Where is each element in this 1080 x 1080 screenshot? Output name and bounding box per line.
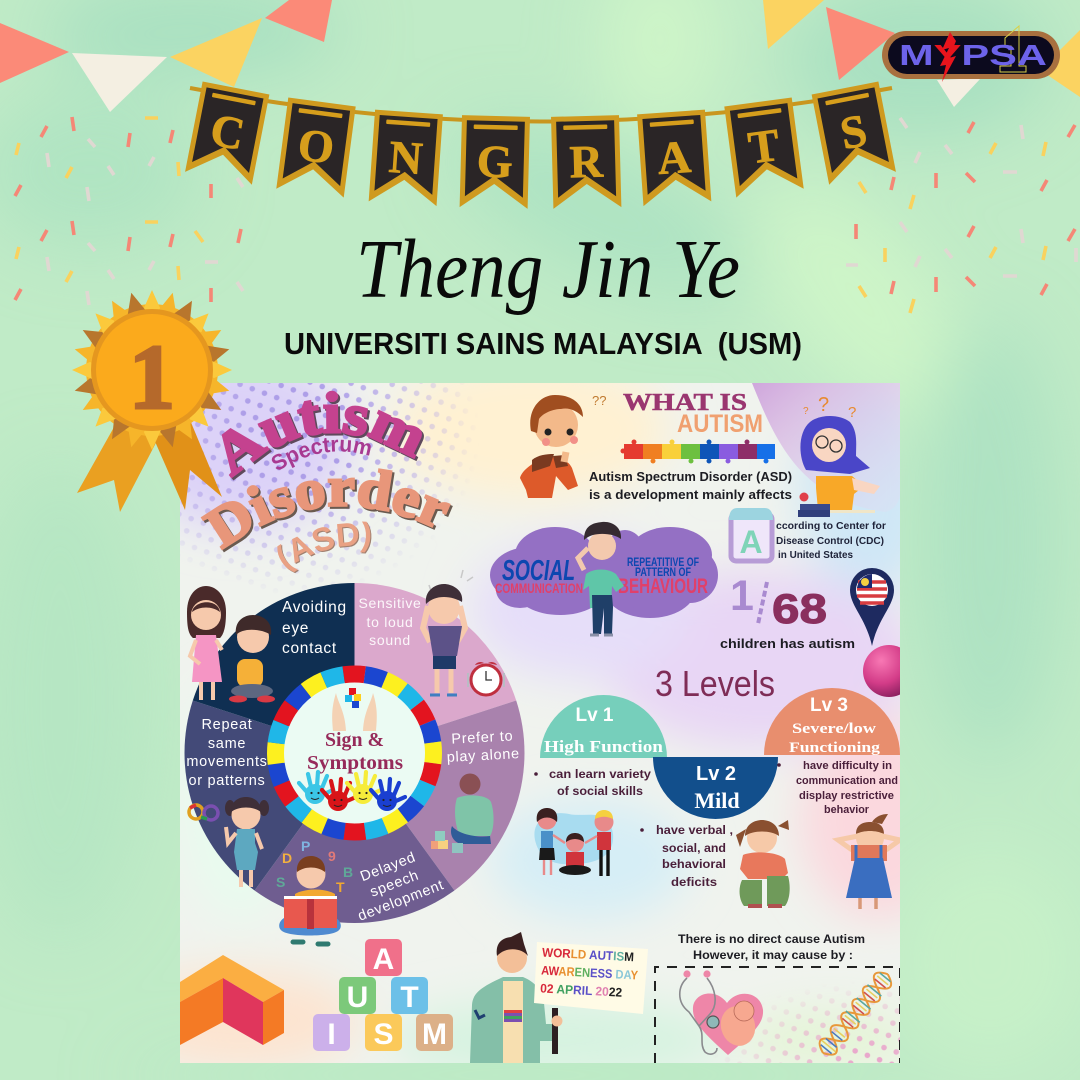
icon: letter A block (729, 508, 773, 561)
level 1: Lv 1 (575, 705, 614, 726)
segment: repeat same movements: or patterns (188, 773, 266, 789)
icon: four coloured hands (299, 772, 405, 811)
winner name: Theng Jin Ye (356, 223, 740, 316)
text: according to cdc: ccording to Center for (776, 520, 886, 532)
segment: repeat same movements: Repeat (202, 717, 252, 733)
autism letter blocks (313, 939, 453, 1051)
floating letters: P (301, 838, 310, 854)
statistic: 1/68 (730, 572, 827, 632)
character: thinking girl with books: ? (803, 406, 809, 417)
heading: what is autism: WHAT IS (623, 390, 747, 416)
autism letter blocks: T (400, 981, 419, 1014)
floating letters: D (282, 850, 292, 866)
level 3: communication and (796, 775, 898, 787)
title: Autism Spectrum Disorder (ASD): Spectrum (272, 438, 371, 470)
heading: what is autism (592, 390, 763, 438)
character: thinking girl with books: ? (848, 404, 856, 421)
character: thinking girl with books: ? (818, 394, 829, 416)
flag O (276, 98, 356, 198)
segment: delayed speech development: speech (368, 867, 421, 901)
icon: infinity rainbow (189, 805, 218, 820)
poster (180, 383, 900, 1063)
text: no direct cause: There is no direct cause Autism (678, 934, 865, 946)
level 1: of social skills (557, 784, 643, 798)
heading: sign and symptoms (307, 729, 403, 774)
title: Autism Spectrum Disorder (ASD): (ASD) (277, 522, 372, 574)
character: man with jacket (470, 932, 562, 1063)
halftone dots top left (180, 383, 468, 586)
flag R (551, 115, 621, 209)
level 2: have verbal , (656, 823, 733, 837)
flag R: R (569, 136, 604, 187)
sign: world autism awareness day: 02 APRIL 2022 (540, 981, 623, 1000)
sign: world autism awareness day (534, 942, 648, 1014)
level 2: Mild (694, 788, 740, 813)
hub centre (282, 681, 426, 825)
segment: delayed speech development: Delayed (358, 849, 418, 885)
character: family of three (534, 808, 614, 876)
flag S: S (836, 104, 871, 159)
flag N (369, 110, 443, 206)
logo: MYPSA: M Y PSA (899, 40, 1047, 72)
sunburst (72, 290, 232, 450)
university: UNIVERSITI SAINS MALAYSIA (USM) (284, 326, 802, 361)
icon: heart with fetus and stethoscope (680, 970, 763, 1055)
label: repetitive pattern: REPEATITIVE OF (627, 555, 699, 569)
heading: what is autism: AUTISM (677, 410, 763, 438)
wheel: sign and symptoms (185, 583, 524, 925)
flag T (724, 98, 804, 198)
autism letter blocks: I (327, 1018, 336, 1051)
banner string (190, 88, 892, 122)
icon: toy blocks (431, 831, 463, 853)
level 2 (640, 757, 778, 889)
character: confused boy (578, 522, 624, 635)
segment: prefer to play alone: play alone (446, 746, 520, 766)
segment: repeat same movements: movements (186, 754, 268, 770)
character: girl in pink (187, 586, 226, 700)
banner: CONGRATS (185, 82, 896, 209)
character: sitting girl hugging knees (736, 820, 790, 906)
floating letters: B (343, 864, 353, 880)
segment: sensitive to loud sound: sound (369, 632, 411, 648)
segment: sensitive to loud sound (354, 583, 516, 726)
puzzle ring (266, 664, 443, 842)
label: repetitive pattern (627, 555, 699, 579)
sign: world autism awareness day: WORLD AUTISM (542, 945, 634, 964)
autism letter blocks: A (373, 943, 394, 976)
level 2: Lv 2 (696, 763, 736, 785)
halftone dots bottom right (726, 988, 900, 1063)
level 2: behavioral (662, 857, 726, 871)
autism letter blocks: S (373, 1018, 394, 1051)
label: communication: COMMUNICATION (495, 580, 583, 596)
ribbon right (150, 420, 222, 510)
title: Autism Spectrum Disorder (ASD) (200, 390, 453, 574)
bunting top left (0, 0, 332, 112)
floating letters: 9 (328, 848, 336, 864)
character: child playing alone (451, 774, 494, 844)
text: asd definition (589, 470, 792, 502)
level 1: can learn variety (549, 767, 651, 781)
heading: what is autism: ?? (592, 393, 606, 408)
segment: avoiding eye contact: contact (282, 640, 337, 657)
icon: hands holding puzzle (332, 688, 377, 731)
heading: sign and symptoms: Sign & (325, 729, 384, 751)
logo: isometric block (180, 955, 284, 1045)
level 3: display restrictive (799, 790, 894, 802)
flag A: A (656, 131, 693, 184)
label: repetitive pattern: PATTERN OF (635, 565, 691, 579)
level 3: Functioning (789, 740, 881, 756)
flag S (812, 82, 896, 185)
character: seated boy in orange (229, 615, 275, 702)
segment: sensitive to loud sound: to loud (367, 614, 413, 630)
level 1: High Function (544, 737, 664, 756)
text: children has autism: children has autism (720, 636, 855, 651)
level 3: Severe/low (792, 721, 876, 737)
segment: delayed speech development: development (356, 877, 446, 925)
flag G (460, 115, 530, 209)
character: girl covering ears (838, 814, 900, 909)
label: behaviour: BEHAVIOUR (618, 575, 708, 598)
segment: avoiding eye contact: eye (282, 620, 309, 637)
dashed causes box (655, 967, 900, 1063)
flag G: G (476, 136, 513, 187)
icon: alarm clock (468, 662, 504, 695)
icon: malaysia map pin (850, 568, 894, 646)
level 2: deficits (671, 875, 717, 889)
segment: repeat same movements (184, 700, 311, 890)
segment: avoiding eye contact: Avoiding (282, 599, 347, 616)
pink sphere (863, 645, 915, 697)
text: according to cdc: in United States (778, 549, 853, 561)
flag T: T (745, 119, 782, 173)
heading: sign and symptoms: Symptoms (307, 752, 403, 774)
segment: sensitive to loud sound: Sensitive (358, 595, 422, 611)
text: no direct cause: However, it may cause by : (693, 950, 853, 962)
ribbon left (77, 420, 160, 512)
text: no direct cause (678, 934, 865, 962)
cloud: social communication and behaviour (490, 522, 718, 635)
segment: prefer to play alone: Prefer to (451, 728, 514, 748)
floating letters (276, 842, 352, 892)
title: Autism Spectrum Disorder (ASD): Autism (222, 390, 424, 480)
level 3 (764, 688, 900, 816)
heading: 3 levels: 3 Levels (655, 663, 775, 704)
flag A (637, 110, 711, 206)
segment: repeat same movements: same (208, 736, 246, 752)
medal (72, 290, 232, 512)
statistic: 1/68: 68 (772, 585, 827, 632)
floating letters: T (336, 879, 345, 895)
sign: world autism awareness day: AWARENESS DAY (541, 963, 639, 983)
poster background (180, 383, 900, 1063)
level 3: Lv 3 (810, 695, 848, 716)
label: social: SOCIAL (502, 555, 575, 587)
level 3: have difficulty in (803, 760, 892, 772)
bunting top right (763, 0, 1080, 107)
rainbow puzzle strip (620, 440, 775, 464)
statistic: 1/68: 1 (730, 572, 754, 620)
confetti left (15, 117, 243, 305)
floating letters: S (276, 874, 285, 890)
title: Autism Spectrum Disorder (ASD): Disorder (200, 468, 453, 552)
icon: dna helix (815, 968, 895, 1059)
text: asd definition: Autism Spectrum Disorder (ASD) (589, 470, 792, 484)
text: according to cdc: Disease Control (CDC) (776, 535, 884, 547)
character: thinking boy (520, 395, 583, 498)
segment: delayed speech development (254, 820, 454, 923)
character: boy covering ears (423, 570, 473, 695)
level 3: behavior (824, 804, 870, 816)
autism letter blocks: U (347, 981, 368, 1014)
medal number: 1 (129, 326, 175, 428)
logo: MYPSA (882, 26, 1060, 82)
text: according to cdc (776, 520, 886, 561)
level 1 (534, 695, 667, 798)
segment: avoiding eye contact (192, 583, 354, 726)
text: asd definition: is a development mainly affects (589, 488, 792, 502)
character: thinking girl with books (798, 394, 880, 517)
segment: prefer to play alone (398, 700, 524, 890)
flag C (185, 82, 269, 185)
flag O: O (295, 119, 337, 174)
confetti right (846, 118, 1076, 313)
icon: letter A block: A (739, 524, 763, 560)
character: reading boy (279, 856, 341, 944)
level 2: social, and (662, 841, 726, 855)
purple corner blob (752, 383, 900, 512)
flag N: N (387, 131, 424, 184)
flag C: C (206, 103, 249, 160)
character: girl waving in overalls (225, 797, 269, 887)
autism letter blocks: M (422, 1018, 447, 1051)
